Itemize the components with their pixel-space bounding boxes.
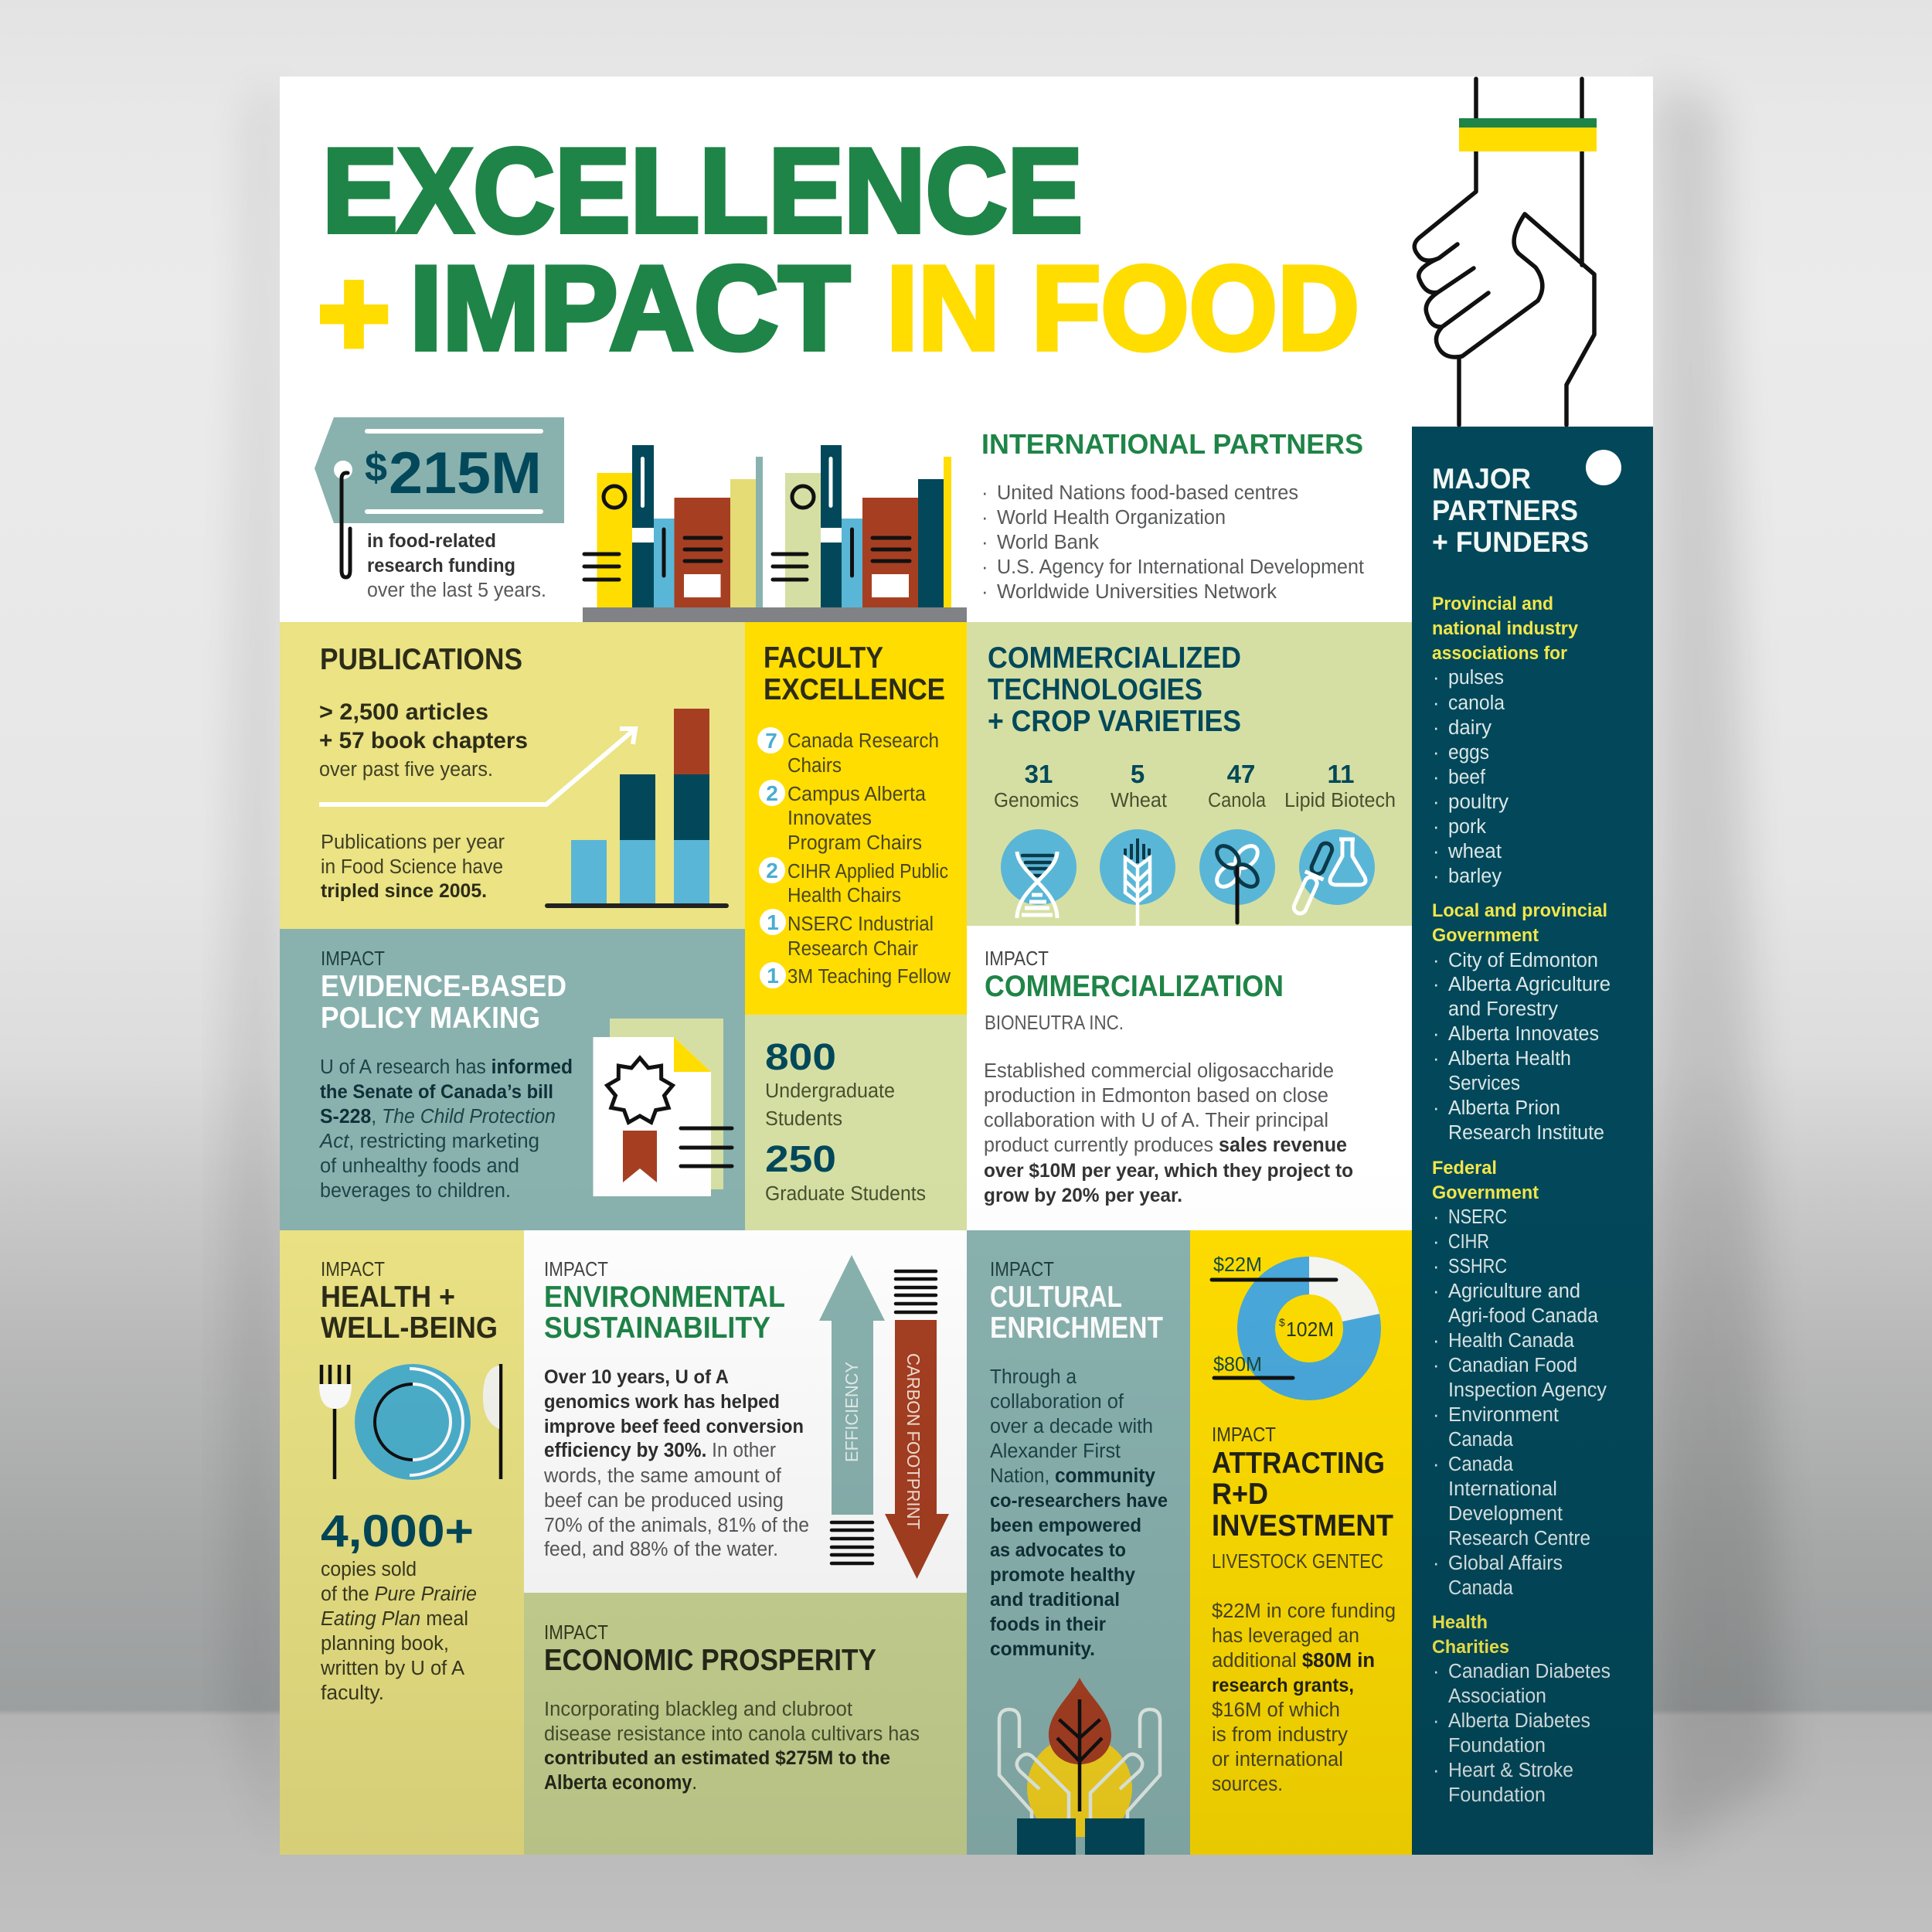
icon: clover bbox=[1199, 829, 1275, 923]
chair counts: 3M Teaching Fellow bbox=[787, 966, 951, 988]
list: federal government: International bbox=[1448, 1478, 1557, 1500]
panel: health and well-being bbox=[280, 1230, 524, 1855]
panel: economic prosperity: IMPACT bbox=[544, 1622, 608, 1644]
poster shadow left bbox=[228, 85, 280, 1855]
body text: over $10M per year, which they project to bbox=[984, 1160, 1353, 1182]
donut chart: $22M bbox=[1213, 1254, 1262, 1276]
heading: + FUNDERS bbox=[1432, 526, 1589, 558]
panel: publications: + 57 book chapters bbox=[319, 728, 528, 753]
body text: S-228, The Child Protection bbox=[320, 1106, 556, 1128]
panel: publications: > 2,500 articles bbox=[319, 699, 488, 725]
list: local and provincial government: · bbox=[1433, 1097, 1439, 1119]
list: federal government: Development bbox=[1448, 1503, 1563, 1525]
panel: cultural enrichment bbox=[967, 1230, 1190, 1855]
body text: beverages to children. bbox=[320, 1180, 511, 1202]
title: + bbox=[318, 243, 390, 382]
panel: student numbers bbox=[745, 1015, 967, 1230]
list: local and provincial government: Alberta Prion bbox=[1448, 1097, 1560, 1119]
list: federal government: Global Affairs bbox=[1448, 1553, 1563, 1574]
body text: Over 10 years, U of A bbox=[544, 1366, 729, 1388]
list: federal government: Federal bbox=[1432, 1158, 1497, 1179]
stat counts: 11 bbox=[1328, 760, 1354, 788]
chair counts: Campus Alberta bbox=[787, 784, 927, 805]
body text: product currently produces sales revenue bbox=[984, 1134, 1347, 1156]
list: industry associations: barley bbox=[1448, 866, 1502, 887]
body text: disease resistance into canola cultivars has bbox=[544, 1723, 920, 1745]
chair counts: 2 bbox=[766, 859, 778, 883]
chair counts: CIHR Applied Public bbox=[787, 861, 948, 883]
panel: publications: Publications per year bbox=[321, 832, 505, 853]
title bbox=[318, 124, 1359, 382]
body text: of the Pure Prairie bbox=[321, 1583, 477, 1605]
list: health charities: Heart & Stroke bbox=[1448, 1760, 1573, 1781]
icon: plate with fork and knife bbox=[319, 1364, 501, 1480]
donut chart: 102M bbox=[1286, 1319, 1334, 1341]
list: industry associations: pork bbox=[1448, 816, 1486, 838]
title: IN FOOD bbox=[886, 241, 1359, 375]
list: health charities: Foundation bbox=[1448, 1735, 1546, 1757]
body text: faculty. bbox=[321, 1682, 384, 1704]
body text: written by U of A bbox=[320, 1658, 464, 1679]
poster shadow right bbox=[1653, 85, 1785, 1859]
price tag: $215M funding bbox=[315, 417, 564, 577]
list: industry associations: · bbox=[1433, 841, 1439, 862]
poster sheet bbox=[280, 77, 1653, 1855]
body text: words, the same amount of bbox=[543, 1465, 782, 1487]
heading bbox=[1432, 463, 1589, 558]
body text: Nation, community bbox=[990, 1465, 1156, 1487]
list: health charities: · bbox=[1433, 1661, 1439, 1682]
bar chart bbox=[547, 709, 726, 906]
list: industry associations: · bbox=[1433, 742, 1439, 764]
body text: feed, and 88% of the water. bbox=[544, 1539, 778, 1560]
list: industry associations: · bbox=[1433, 692, 1439, 714]
panel: commercialization: BIONEUTRA INC. bbox=[985, 1012, 1124, 1034]
body text: co-researchers have bbox=[990, 1490, 1168, 1512]
list: federal government bbox=[1432, 1158, 1607, 1599]
list: federal government: · bbox=[1433, 1454, 1439, 1475]
panel: economic prosperity bbox=[524, 1593, 967, 1855]
text: international partners: · bbox=[981, 581, 988, 603]
list: industry associations: canola bbox=[1448, 692, 1505, 714]
chair counts: 2 bbox=[766, 781, 778, 805]
stat counts: 5 bbox=[1131, 760, 1145, 788]
list: industry associations: Provincial and bbox=[1432, 594, 1553, 614]
stat counts: Lipid Biotech bbox=[1284, 790, 1396, 811]
list: local and provincial government: Alberta Innovates bbox=[1448, 1023, 1599, 1045]
list: industry associations bbox=[1432, 594, 1578, 887]
chair counts: 1 bbox=[767, 910, 779, 934]
body text: grow by 20% per year. bbox=[984, 1185, 1182, 1206]
panel: environmental sustainability: ENVIRONMENTAL bbox=[544, 1281, 785, 1314]
list: health charities: Foundation bbox=[1448, 1784, 1546, 1806]
panel: health and well-being: IMPACT bbox=[321, 1259, 385, 1281]
body text: collaboration with U of A. Their principal bbox=[984, 1110, 1328, 1131]
stat counts: Wheat bbox=[1111, 790, 1167, 811]
body text: sources. bbox=[1212, 1774, 1283, 1795]
panel: publications: in Food Science have bbox=[321, 856, 503, 878]
text: funding caption: in food-related bbox=[367, 530, 496, 552]
chair counts: Program Chairs bbox=[787, 832, 922, 854]
list: federal government: Government bbox=[1432, 1182, 1539, 1203]
list: federal government: NSERC bbox=[1448, 1206, 1507, 1228]
list: local and provincial government: · bbox=[1433, 974, 1439, 995]
body text: improve beef feed conversion bbox=[544, 1416, 804, 1437]
panel: commercialized technologies bbox=[967, 622, 1412, 926]
icon: wheat bbox=[1100, 829, 1175, 926]
body text: Incorporating blackleg and clubroot bbox=[544, 1699, 852, 1720]
list: federal government: Agri-food Canada bbox=[1448, 1305, 1599, 1327]
body text: U of A research has informed bbox=[320, 1056, 573, 1078]
panel: evidence-based policy making bbox=[280, 929, 745, 1230]
donut chart bbox=[1212, 1254, 1381, 1400]
list: federal government: · bbox=[1433, 1231, 1439, 1253]
chair counts: 1 bbox=[767, 964, 779, 988]
panel: student numbers: Graduate Students bbox=[765, 1183, 926, 1205]
text: international partners: World Health Organization bbox=[997, 507, 1226, 529]
list: federal government: Canada bbox=[1448, 1577, 1514, 1599]
body text: Eating Plan meal bbox=[321, 1608, 468, 1630]
body text: contributed an estimated $275M to the bbox=[544, 1747, 890, 1769]
panel: student numbers: Undergraduate bbox=[765, 1080, 895, 1102]
chair counts: NSERC Industrial bbox=[787, 913, 934, 935]
panel: attracting R+D investment: LIVESTOCK GENTEC bbox=[1212, 1551, 1383, 1573]
panel: commercialization bbox=[967, 926, 1412, 1230]
body text bbox=[543, 1366, 809, 1560]
panel: commercialization: IMPACT bbox=[985, 948, 1049, 970]
list: local and provincial government bbox=[1432, 900, 1611, 1144]
text: international partners bbox=[981, 428, 1364, 603]
list: federal government: · bbox=[1433, 1256, 1439, 1277]
list: federal government: · bbox=[1433, 1206, 1439, 1228]
body text: additional $80M in bbox=[1212, 1650, 1375, 1672]
list: local and provincial government: Services bbox=[1448, 1073, 1520, 1094]
chair counts: Chairs bbox=[787, 755, 842, 777]
body text: community. bbox=[990, 1638, 1095, 1660]
text: funding caption: over the last 5 years. bbox=[367, 580, 546, 601]
panel: commercialized technologies: TECHNOLOGIES bbox=[988, 673, 1202, 706]
list: industry associations: · bbox=[1433, 866, 1439, 887]
list: federal government: SSHRC bbox=[1448, 1256, 1507, 1277]
body text: promote healthy bbox=[990, 1564, 1135, 1586]
body text bbox=[990, 1366, 1168, 1660]
list: industry associations: · bbox=[1433, 816, 1439, 838]
body text: genomics work has helped bbox=[544, 1391, 780, 1413]
heading: MAJOR bbox=[1432, 463, 1531, 495]
body text: research grants, bbox=[1212, 1675, 1354, 1696]
body text: Alberta economy. bbox=[544, 1772, 697, 1794]
panel: publications: over past five years. bbox=[319, 759, 493, 781]
body text bbox=[1212, 1600, 1396, 1795]
arrow: efficiency up bbox=[819, 1255, 885, 1563]
list: industry associations: · bbox=[1433, 667, 1439, 689]
panel: environmental sustainability: SUSTAINABILITY bbox=[544, 1311, 770, 1345]
panel: faculty excellence: FACULTY bbox=[764, 641, 883, 675]
list: federal government: Health Canada bbox=[1448, 1330, 1575, 1352]
list: health charities: Association bbox=[1448, 1685, 1546, 1707]
stat counts: 47 bbox=[1227, 760, 1255, 788]
body text: has leveraged an bbox=[1212, 1625, 1359, 1647]
panel: student numbers: Students bbox=[765, 1108, 842, 1130]
body text: over a decade with bbox=[990, 1416, 1153, 1437]
panel: publications: tripled since 2005. bbox=[321, 880, 487, 902]
body text bbox=[318, 1056, 573, 1202]
list: local and provincial government: Research Institute bbox=[1448, 1122, 1604, 1144]
body text: planning book, bbox=[321, 1633, 449, 1655]
list: federal government: Canada bbox=[1448, 1429, 1514, 1451]
chair counts: Canada Research bbox=[787, 730, 939, 752]
panel: commercialization: COMMERCIALIZATION bbox=[985, 970, 1284, 1003]
panel: faculty excellence bbox=[745, 622, 967, 1015]
body text bbox=[984, 1060, 1353, 1206]
body text bbox=[544, 1699, 920, 1794]
text: international partners: · bbox=[981, 507, 988, 529]
list: industry associations: · bbox=[1433, 767, 1439, 788]
icon: books on shelf bbox=[583, 445, 967, 622]
icon: DNA bbox=[1001, 829, 1077, 918]
body text: Established commercial oligosaccharide bbox=[984, 1060, 1334, 1082]
panel: environmental sustainability bbox=[524, 1230, 967, 1593]
list: industry associations: pulses bbox=[1448, 667, 1504, 689]
list: health charities bbox=[1432, 1612, 1611, 1806]
list: local and provincial government: · bbox=[1433, 1048, 1439, 1070]
list: federal government: Inspection Agency bbox=[1448, 1379, 1607, 1401]
body text: or international bbox=[1212, 1749, 1343, 1770]
panel: attracting R+D investment: IMPACT bbox=[1212, 1424, 1276, 1446]
panel: health and well-being: 4,000+ bbox=[321, 1506, 474, 1556]
arrow: carbon footprint down bbox=[885, 1271, 949, 1579]
list: health charities: Health bbox=[1432, 1612, 1488, 1633]
body text: the Senate of Canada’s bill bbox=[320, 1081, 553, 1103]
list: industry associations: beef bbox=[1448, 767, 1486, 788]
growth arrow bbox=[319, 729, 635, 804]
chair counts: 7 bbox=[765, 729, 777, 753]
list: federal government: · bbox=[1433, 1281, 1439, 1302]
list: local and provincial government: Local and provincial bbox=[1432, 900, 1607, 921]
list: local and provincial government: City of Edmonton bbox=[1448, 950, 1598, 971]
text: international partners: United Nations food-based centres bbox=[997, 482, 1298, 504]
chair counts: Innovates bbox=[787, 808, 872, 829]
list: industry associations: dairy bbox=[1448, 717, 1492, 739]
panel: publications: PUBLICATIONS bbox=[320, 643, 522, 676]
icon: clasped hands with bracelet bbox=[1414, 79, 1597, 425]
body text: copies sold bbox=[321, 1559, 417, 1580]
price tag: $215M funding: $ bbox=[365, 445, 387, 490]
list: federal government: Environment bbox=[1448, 1404, 1559, 1426]
text: international partners: U.S. Agency for International Development bbox=[997, 556, 1364, 578]
list: industry associations: eggs bbox=[1448, 742, 1489, 764]
list: local and provincial government: Government bbox=[1432, 925, 1539, 946]
list: local and provincial government: · bbox=[1433, 1023, 1439, 1045]
list: federal government: Research Centre bbox=[1448, 1528, 1590, 1549]
panel: faculty excellence: EXCELLENCE bbox=[764, 673, 945, 706]
body text: Through a bbox=[990, 1366, 1077, 1388]
list: industry associations: · bbox=[1433, 717, 1439, 739]
body text: $22M in core funding bbox=[1212, 1600, 1396, 1622]
text: international partners: INTERNATIONAL PARTNERS bbox=[981, 428, 1363, 460]
body text: production in Edmonton based on close bbox=[984, 1085, 1328, 1107]
text: international partners: · bbox=[981, 556, 988, 578]
panel: health and well-being: HEALTH + bbox=[321, 1281, 455, 1314]
list: local and provincial government: Alberta Health bbox=[1448, 1048, 1571, 1070]
panel: cultural enrichment: ENRICHMENT bbox=[990, 1311, 1163, 1345]
stat counts: Canola bbox=[1208, 790, 1267, 811]
list: industry associations: associations for bbox=[1432, 643, 1567, 664]
body text: $16M of which bbox=[1212, 1699, 1340, 1721]
title: IMPACT bbox=[410, 241, 850, 375]
panel: cultural enrichment: CULTURAL bbox=[990, 1281, 1122, 1314]
panel: attracting R+D investment: R+D bbox=[1212, 1478, 1268, 1511]
list: federal government: CIHR bbox=[1448, 1231, 1489, 1253]
body text: as advocates to bbox=[990, 1539, 1126, 1561]
body text: beef can be produced using bbox=[544, 1490, 784, 1512]
list: health charities: · bbox=[1433, 1710, 1439, 1732]
body text: Act, restricting marketing bbox=[318, 1131, 539, 1152]
text: international partners: · bbox=[981, 482, 988, 504]
icon: hands holding leaf bbox=[999, 1678, 1160, 1855]
panel: attracting R+D investment: ATTRACTING bbox=[1212, 1447, 1385, 1480]
donut chart: $ bbox=[1279, 1316, 1285, 1328]
chair counts: Health Chairs bbox=[787, 885, 901, 906]
list: federal government: · bbox=[1433, 1355, 1439, 1376]
list: health charities: Charities bbox=[1432, 1637, 1509, 1658]
stat counts: Genomics bbox=[994, 790, 1079, 811]
panel: commercialized technologies: + CROP VARIETIES bbox=[988, 705, 1241, 738]
list: federal government: · bbox=[1433, 1553, 1439, 1574]
panel: publications bbox=[280, 622, 745, 929]
chair counts bbox=[757, 727, 951, 988]
heading: PARTNERS bbox=[1432, 495, 1578, 526]
list: industry associations: · bbox=[1433, 791, 1439, 813]
panel: student numbers: 250 bbox=[765, 1139, 836, 1180]
body text: 70% of the animals, 81% of the bbox=[544, 1515, 809, 1536]
list: federal government: · bbox=[1433, 1404, 1439, 1426]
text: funding caption: research funding bbox=[367, 555, 515, 577]
panel: cultural enrichment: IMPACT bbox=[990, 1259, 1054, 1281]
list: federal government: Agriculture and bbox=[1448, 1281, 1580, 1302]
panel: health and well-being: WELL-BEING bbox=[321, 1311, 498, 1345]
panel: economic prosperity: ECONOMIC PROSPERITY bbox=[544, 1644, 876, 1677]
panel: evidence-based policy making: POLICY MAKING bbox=[321, 1002, 540, 1035]
list: health charities: Canadian Diabetes bbox=[1448, 1661, 1611, 1682]
body text: and traditional bbox=[990, 1589, 1120, 1611]
list: federal government: Canadian Food bbox=[1448, 1355, 1577, 1376]
text: international partners: Worldwide Universities Network bbox=[997, 581, 1277, 603]
icon: certificate document bbox=[594, 1019, 732, 1196]
body text: foods in their bbox=[990, 1614, 1106, 1635]
body text: Alexander First bbox=[990, 1440, 1121, 1462]
panel: evidence-based policy making: EVIDENCE-BASED bbox=[321, 970, 566, 1003]
list: industry associations: poultry bbox=[1448, 791, 1509, 813]
text: international partners: World Bank bbox=[997, 532, 1099, 553]
body text bbox=[320, 1559, 477, 1704]
list: industry associations: wheat bbox=[1447, 841, 1502, 862]
list: industry associations: national industry bbox=[1432, 618, 1578, 639]
panel: evidence-based policy making: IMPACT bbox=[321, 948, 385, 970]
list: health charities: Alberta Diabetes bbox=[1448, 1710, 1590, 1732]
donut chart: $80M bbox=[1213, 1354, 1262, 1376]
panel: attracting R+D investment bbox=[1190, 1230, 1412, 1855]
stat counts bbox=[994, 760, 1396, 811]
panel: environmental sustainability: IMPACT bbox=[544, 1259, 608, 1281]
panel: major partners and funders sidebar bbox=[1412, 427, 1653, 1855]
text: funding caption bbox=[367, 530, 546, 601]
icon: dropper and flask bbox=[1288, 829, 1375, 917]
list: health charities: · bbox=[1433, 1760, 1439, 1781]
list: federal government: · bbox=[1433, 1330, 1439, 1352]
body text: is from industry bbox=[1212, 1724, 1348, 1746]
title: EXCELLENCE bbox=[322, 124, 1083, 257]
arrow: carbon footprint down: CARBON FOOTPRINT bbox=[903, 1353, 923, 1529]
text: international partners: · bbox=[981, 532, 988, 553]
body text: of unhealthy foods and bbox=[320, 1155, 519, 1177]
list: local and provincial government: · bbox=[1433, 950, 1439, 971]
chair counts: Research Chair bbox=[787, 938, 918, 960]
panel: commercialized technologies: COMMERCIALIZED bbox=[988, 641, 1241, 675]
panel: student numbers: 800 bbox=[765, 1037, 836, 1078]
list: local and provincial government: Alberta Agriculture bbox=[1448, 974, 1611, 995]
body text: efficiency by 30%. In other bbox=[544, 1440, 776, 1461]
body text: collaboration of bbox=[990, 1391, 1124, 1413]
list: federal government: Canada bbox=[1448, 1454, 1514, 1475]
list: local and provincial government: and Forestry bbox=[1448, 998, 1558, 1020]
price tag: $215M funding: 215M bbox=[389, 440, 542, 506]
stat counts: 31 bbox=[1025, 760, 1053, 788]
arrow: efficiency up: EFFICIENCY bbox=[842, 1362, 862, 1462]
body text: been empowered bbox=[990, 1515, 1141, 1536]
panel: attracting R+D investment: INVESTMENT bbox=[1212, 1509, 1393, 1543]
